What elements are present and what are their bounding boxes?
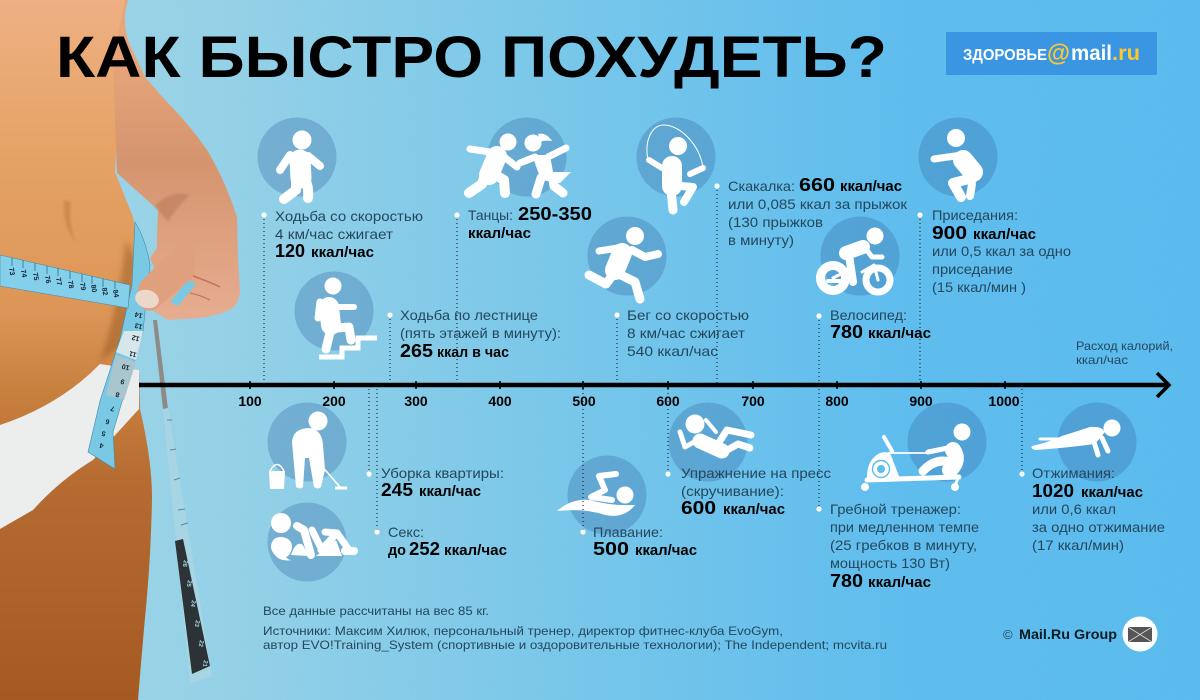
- item: squats 900: (15 ккал/мин ): [932, 279, 1026, 295]
- item: rowing machine 780: [816, 385, 986, 591]
- measuring tape: 24: [189, 600, 196, 608]
- measuring tape: 25: [185, 580, 192, 588]
- item: bicycle 780: Велосипед:: [830, 307, 907, 323]
- tape numbers: 4: [99, 441, 105, 449]
- item: squats 900: Приседания:: [932, 207, 1018, 223]
- item: cleaning 245: Уборка квартиры:: [381, 465, 504, 481]
- item: stairs 265: ккал в час: [437, 345, 509, 361]
- calorie axis: [139, 373, 1169, 409]
- tape numbers: 13: [134, 321, 144, 330]
- calorie axis: 900: [909, 393, 933, 409]
- measuring tape: 21: [201, 660, 208, 668]
- item: stairs 265: (пять этажей в минуту):: [400, 325, 561, 341]
- logo: mail: [1071, 42, 1112, 65]
- item: squats 900: приседание: [932, 261, 1013, 277]
- item: running 540: 8 км/час сжигает: [627, 325, 746, 341]
- item: rowing machine 780: при медленном темпе: [830, 519, 979, 535]
- item: running 540: [588, 216, 749, 385]
- item: jump rope 660: Скакалка:: [728, 178, 795, 194]
- title: КАК БЫСТРО ПОХУДЕТЬ?: [56, 25, 887, 90]
- item: rowing machine 780: мощность 130 Вт): [830, 555, 950, 571]
- icon: mail envelope: [1122, 616, 1158, 652]
- item: push-ups 1020: или 0,6 ккал: [1032, 501, 1116, 517]
- item: jump rope 660: 660: [799, 174, 835, 195]
- item: sex 252: 252: [409, 538, 440, 559]
- tape numbers: 79: [78, 282, 86, 291]
- photo: woman measuring waist with tape: [0, 0, 240, 700]
- item: sex 252: Секс:: [388, 524, 424, 540]
- calorie axis: 700: [741, 393, 765, 409]
- item: rowing machine 780: Гребной тренажер:: [830, 501, 961, 517]
- copyright: Mail.Ru Group: [1019, 626, 1117, 642]
- tape numbers: 77: [54, 277, 62, 286]
- logo: ЗДОРОВЬЕ: [963, 47, 1047, 64]
- item: jump rope 660: в минуту): [728, 232, 794, 248]
- tape numbers: 80: [89, 284, 97, 293]
- tape numbers: 76: [43, 275, 51, 284]
- calorie axis: 300: [404, 393, 428, 409]
- item: cleaning 245: 245: [381, 479, 413, 500]
- axis title: [1076, 339, 1173, 367]
- item: rowing machine 780: (25 гребков в минуту,: [830, 537, 977, 553]
- calorie axis: 500: [572, 393, 596, 409]
- item: jump rope 660: [636, 118, 908, 385]
- item: rowing machine 780: 780: [830, 570, 863, 591]
- item: push-ups 1020: [1019, 385, 1165, 553]
- tape numbers: 5: [101, 429, 107, 437]
- measuring tape: 23: [193, 620, 200, 628]
- tape numbers: 9: [120, 377, 126, 385]
- item: rowing machine 780: ккал/час: [868, 575, 931, 591]
- item: push-ups 1020: за одно отжимание: [1032, 519, 1165, 535]
- item: crunches 600: [665, 385, 831, 518]
- tape numbers: 82: [100, 287, 108, 296]
- sources: Источники: Максим Хилюк, персональный тренер, директор фитнес-клуба EvoGym,: [263, 624, 783, 638]
- item: swimming 500: 500: [593, 538, 629, 559]
- item: push-ups 1020: Отжимания:: [1032, 465, 1115, 481]
- sources: автор EVO!Training_System (спортивные и оздоровительные технологии); The Independent; mcvita.ru: [263, 638, 887, 652]
- axis title: ккал/час: [1076, 353, 1128, 367]
- item: dance 250-350: ккал/час: [468, 226, 531, 242]
- tape numbers: [7, 267, 144, 449]
- thumb: [138, 237, 196, 311]
- item: crunches 600: Упражнение на пресс: [681, 465, 831, 481]
- item: crunches 600: ккал/час: [723, 502, 785, 518]
- arm and hand: [113, 0, 240, 320]
- item: walking 120: [258, 118, 423, 385]
- note: data basis: Все данные рассчитаны на вес 85 кг.: [263, 604, 489, 618]
- item: swimming 500: ккал/час: [635, 543, 697, 559]
- logo: @: [1047, 40, 1070, 67]
- tape numbers: 12: [131, 333, 141, 342]
- item: sex 252: ккал/час: [444, 543, 507, 559]
- tape numbers: 73: [7, 267, 15, 276]
- item: walking 120: 120: [275, 240, 305, 261]
- calorie axis: 600: [656, 393, 680, 409]
- logo: [946, 32, 1157, 75]
- tape numbers: 78: [66, 280, 74, 289]
- item: bicycle 780: [816, 216, 931, 385]
- item: walking 120: ккал/час: [311, 245, 374, 261]
- item: push-ups 1020: ккал/час: [1081, 485, 1143, 501]
- item: dance 250-350: Танцы:: [468, 207, 513, 223]
- tape numbers: 84: [111, 289, 119, 298]
- underwear: [0, 364, 139, 529]
- logo: .ru: [1112, 42, 1140, 65]
- calorie axis: 1000: [988, 393, 1020, 409]
- item: walking 120: Ходьба со скоростью: [275, 208, 423, 224]
- item: jump rope 660: (130 прыжков: [728, 214, 823, 230]
- item: swimming 500: [557, 385, 697, 559]
- tape numbers: 6: [105, 417, 111, 425]
- item: sex 252: до: [388, 543, 406, 559]
- tape numbers: 8: [115, 390, 121, 398]
- tape numbers: 14: [134, 310, 144, 319]
- thumb nail: [133, 287, 161, 311]
- item: sex 252: [268, 385, 507, 582]
- tape numbers: 74: [19, 269, 27, 278]
- item: swimming 500: Плавание:: [593, 524, 663, 540]
- copyright: ©: [1003, 627, 1013, 642]
- axis title: Расход калорий,: [1076, 339, 1173, 353]
- measuring tape: 22: [197, 640, 204, 648]
- item: crunches 600: 600: [681, 497, 716, 518]
- item: cleaning 245: ккал/час: [419, 484, 481, 500]
- item: push-ups 1020: 1020: [1032, 480, 1074, 501]
- item: stairs 265: [294, 272, 561, 385]
- item: stairs 265: 265: [400, 340, 433, 361]
- item: squats 900: или 0,5 ккал за одно: [932, 243, 1071, 259]
- calorie axis: 100: [238, 393, 262, 409]
- item: jump rope 660: или 0,085 ккал за прыжок: [728, 196, 908, 212]
- item: squats 900: [917, 118, 1071, 385]
- tape numbers: 7: [110, 404, 116, 412]
- item: push-ups 1020: (17 ккал/мин): [1032, 537, 1124, 553]
- calorie axis: 200: [322, 393, 346, 409]
- item: running 540: Бег со скоростью: [627, 307, 749, 323]
- item: dance 250-350: 250-350: [518, 203, 592, 224]
- item: bicycle 780: ккал/час: [868, 326, 931, 342]
- sources: [263, 624, 887, 652]
- item: cleaning 245: [268, 385, 504, 500]
- item: squats 900: 900: [932, 222, 967, 243]
- calorie axis: 400: [488, 393, 512, 409]
- item: squats 900: ккал/час: [973, 227, 1036, 243]
- item: jump rope 660: ккал/час: [840, 179, 902, 195]
- item: running 540: 540 ккал/час: [627, 343, 718, 359]
- item: crunches 600: (скручивание):: [681, 483, 784, 499]
- tape numbers: 11: [128, 349, 138, 358]
- tape numbers: 10: [121, 362, 131, 371]
- measuring tape: [0, 222, 212, 683]
- calorie axis: 800: [825, 393, 849, 409]
- item: stairs 265: Ходьба по лестнице: [400, 307, 538, 323]
- measuring tape: 26: [181, 560, 188, 568]
- item: dance 250-350: [454, 118, 592, 385]
- tape numbers: 75: [31, 272, 39, 281]
- item: bicycle 780: 780: [830, 321, 863, 342]
- item: walking 120: 4 км/час сжигает: [275, 226, 394, 242]
